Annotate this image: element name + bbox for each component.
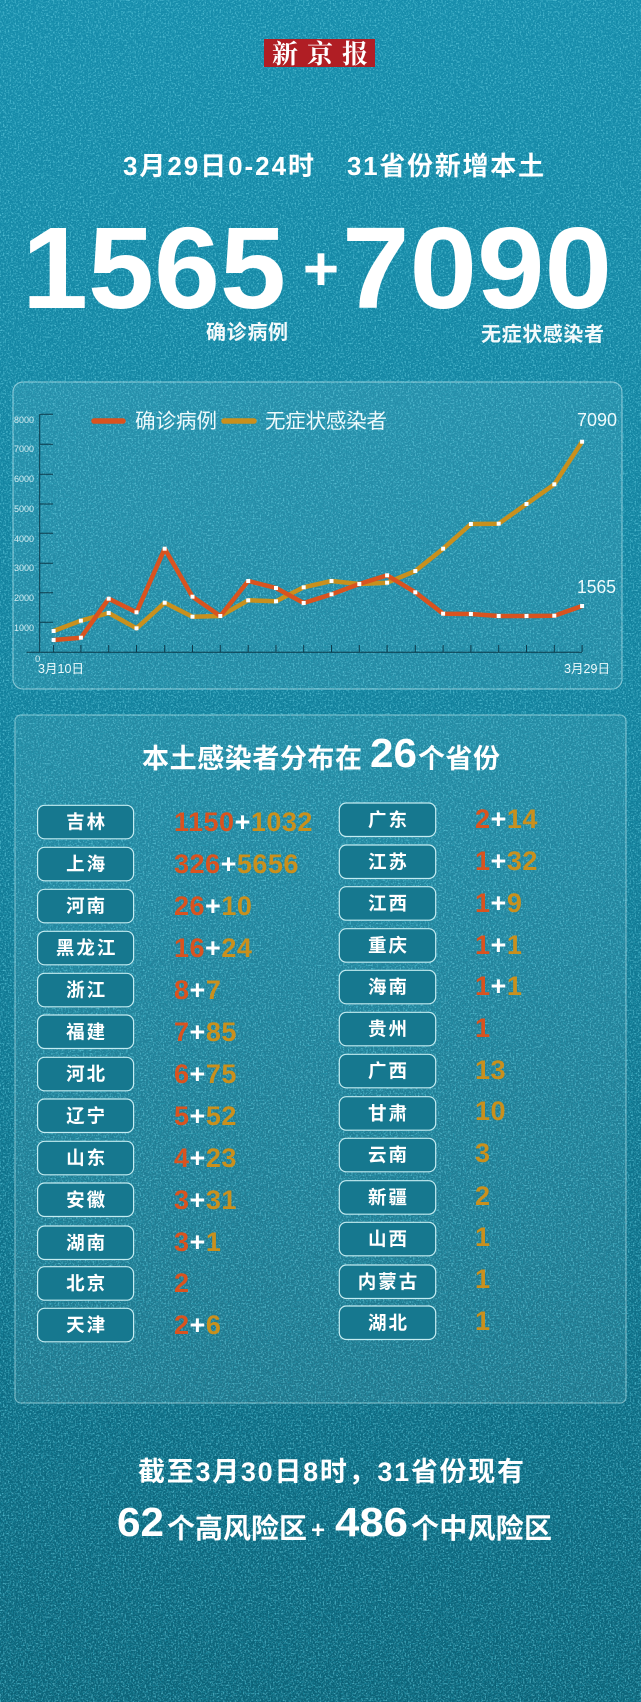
row: 河北: 河北	[66, 1064, 107, 1084]
row: 广西	[339, 1054, 506, 1088]
row: 新疆: 新疆	[368, 1187, 409, 1208]
y axis labels: 3000	[14, 563, 34, 574]
heading: distribution: 个省份	[418, 744, 500, 774]
row: 海南: 1+1	[475, 971, 522, 1001]
row: 海南	[339, 970, 522, 1004]
number: asymptomatic cases: 7090	[342, 203, 612, 333]
row: 福建	[38, 1015, 237, 1048]
legend	[94, 410, 387, 433]
row: 湖南: 湖南	[66, 1232, 107, 1254]
row: 湖北: 1	[475, 1306, 491, 1336]
y axis labels: 8000	[14, 415, 34, 426]
footer line two: 486	[335, 1499, 408, 1545]
panel: province distribution background	[15, 715, 626, 1403]
row: 广东: 2+14	[475, 804, 538, 834]
subtitle: date and scope: 31省份新增本土	[347, 151, 544, 181]
row: 天津: 天津	[66, 1314, 107, 1336]
row: 福建: 福建	[66, 1022, 107, 1042]
end value labels: 7090	[577, 409, 617, 430]
row: 山西: 1	[475, 1222, 491, 1252]
footer line one: 截至3月30日8时，31省份现有	[138, 1457, 524, 1487]
row: 辽宁: 5+52	[174, 1101, 237, 1131]
row: 甘肃	[339, 1096, 506, 1130]
row: 新疆: 2	[475, 1181, 491, 1211]
heading: distribution	[142, 730, 500, 776]
row: 广东: 广东	[368, 810, 409, 830]
row: 辽宁	[38, 1099, 237, 1132]
series: asymptomatic line	[54, 442, 582, 631]
row: 甘肃: 甘肃	[368, 1103, 409, 1124]
date labels	[38, 662, 610, 676]
row: 广西: 广西	[368, 1060, 409, 1082]
date labels: 3月10日	[38, 662, 84, 676]
row: 黑龙江: 16+24	[174, 933, 252, 963]
row: 山东: 4+23	[174, 1143, 237, 1173]
footer line two: 个高风险区	[167, 1513, 307, 1544]
row: 安徽: 3+31	[174, 1185, 237, 1215]
row: 天津	[38, 1308, 221, 1342]
y axis labels: 0	[35, 654, 40, 665]
row: 山西: 山西	[368, 1228, 409, 1250]
row: 甘肃: 10	[475, 1096, 506, 1126]
y axis labels: 4000	[14, 534, 34, 545]
row: 安徽: 安徽	[66, 1190, 107, 1210]
series: confirmed line	[54, 549, 582, 640]
row: 内蒙古	[339, 1264, 491, 1298]
panel: line chart background	[13, 382, 622, 689]
row: 江苏: 1+32	[475, 846, 538, 876]
footer line two	[117, 1499, 552, 1545]
logo: 新京报: 新京报	[272, 39, 368, 69]
row: 浙江: 8+7	[174, 975, 221, 1005]
row: 安徽	[38, 1183, 237, 1216]
row: 浙江: 浙江	[66, 980, 107, 1000]
row: 河北	[38, 1057, 237, 1091]
row: 湖北: 湖北	[368, 1312, 409, 1334]
line chart	[14, 409, 617, 676]
row: 内蒙古: 内蒙古	[358, 1272, 419, 1292]
row: 贵州: 贵州	[368, 1018, 409, 1040]
row: 北京: 北京	[66, 1273, 107, 1294]
row: 山西	[339, 1222, 491, 1256]
subtitle: date and scope: 3月29日0-24时	[123, 151, 314, 181]
row: 河南	[38, 889, 252, 923]
row: 江西: 江西	[368, 893, 409, 914]
y axis labels: 6000	[14, 474, 34, 485]
row: 贵州: 1	[475, 1013, 491, 1043]
row: 江苏	[339, 845, 538, 878]
y axis labels: 7000	[14, 444, 34, 455]
data point markers	[52, 440, 584, 642]
footer: risk areas	[117, 1457, 552, 1545]
y axis labels: 5000	[14, 504, 34, 515]
row: 吉林: 1150+1032	[174, 807, 313, 837]
number: confirmed cases: 1565	[22, 203, 286, 333]
row: 重庆	[339, 929, 522, 962]
row: 福建: 7+85	[174, 1017, 237, 1047]
row: 云南	[339, 1138, 491, 1172]
y axis labels: 2000	[14, 593, 34, 604]
row: 河北: 6+75	[174, 1059, 237, 1089]
legend: 无症状感染者	[265, 410, 387, 433]
row: 湖北	[339, 1306, 491, 1340]
row: 江西	[339, 887, 522, 920]
row: 广西: 13	[475, 1055, 506, 1085]
row: 广东	[339, 803, 538, 836]
row: 天津: 2+6	[174, 1310, 221, 1340]
row: 黑龙江: 黑龙江	[56, 938, 117, 958]
row: 上海: 上海	[66, 854, 107, 874]
label: asymptomatic: 无症状感染者	[481, 323, 604, 346]
footer line two: +	[311, 1517, 325, 1544]
row: 湖南	[38, 1226, 221, 1260]
heading: distribution: 本土感染者分布在	[142, 743, 362, 774]
row: 山东	[38, 1141, 237, 1175]
y axis labels	[14, 415, 40, 665]
subtitle: date and scope	[123, 151, 544, 181]
row: 江苏: 江苏	[368, 852, 409, 872]
row: 云南: 云南	[368, 1144, 409, 1166]
heading: distribution: 26	[370, 730, 417, 776]
row: 吉林: 吉林	[66, 812, 107, 832]
plus sign: +	[303, 235, 339, 304]
row: 黑龙江	[38, 931, 252, 965]
end value labels	[577, 409, 617, 597]
y axis labels: 1000	[14, 623, 34, 634]
row: 内蒙古: 1	[475, 1264, 491, 1294]
date labels: 3月29日	[564, 662, 610, 676]
footer line two: 个中风险区	[411, 1513, 552, 1544]
row: 上海: 326+5656	[174, 849, 299, 879]
footer line two: 62	[117, 1499, 164, 1545]
row: 河南: 河南	[66, 896, 107, 916]
row: 河南: 26+10	[174, 891, 252, 921]
row: 吉林	[38, 805, 313, 839]
right column: provinces	[339, 803, 538, 1340]
end value labels: 1565	[577, 576, 616, 597]
row: 新疆	[339, 1181, 491, 1214]
row: 山东: 山东	[66, 1148, 107, 1168]
row: 湖南: 3+1	[174, 1227, 221, 1257]
left column: provinces	[38, 805, 313, 1342]
row: 海南: 海南	[368, 976, 409, 998]
label: confirmed: 确诊病例	[206, 321, 288, 344]
row: 辽宁: 辽宁	[66, 1106, 107, 1126]
axes and ticks	[27, 414, 582, 652]
row: 重庆: 重庆	[368, 935, 409, 956]
legend: 确诊病例	[135, 410, 217, 433]
row: 浙江	[38, 973, 221, 1007]
row: 云南: 3	[475, 1138, 491, 1168]
row: 江西: 1+9	[475, 888, 522, 918]
row: 北京	[38, 1267, 190, 1300]
row: 贵州	[339, 1012, 491, 1046]
row: 重庆: 1+1	[475, 930, 522, 960]
row: 上海	[38, 847, 299, 881]
headline numbers	[22, 203, 612, 346]
row: 北京: 2	[174, 1268, 190, 1298]
